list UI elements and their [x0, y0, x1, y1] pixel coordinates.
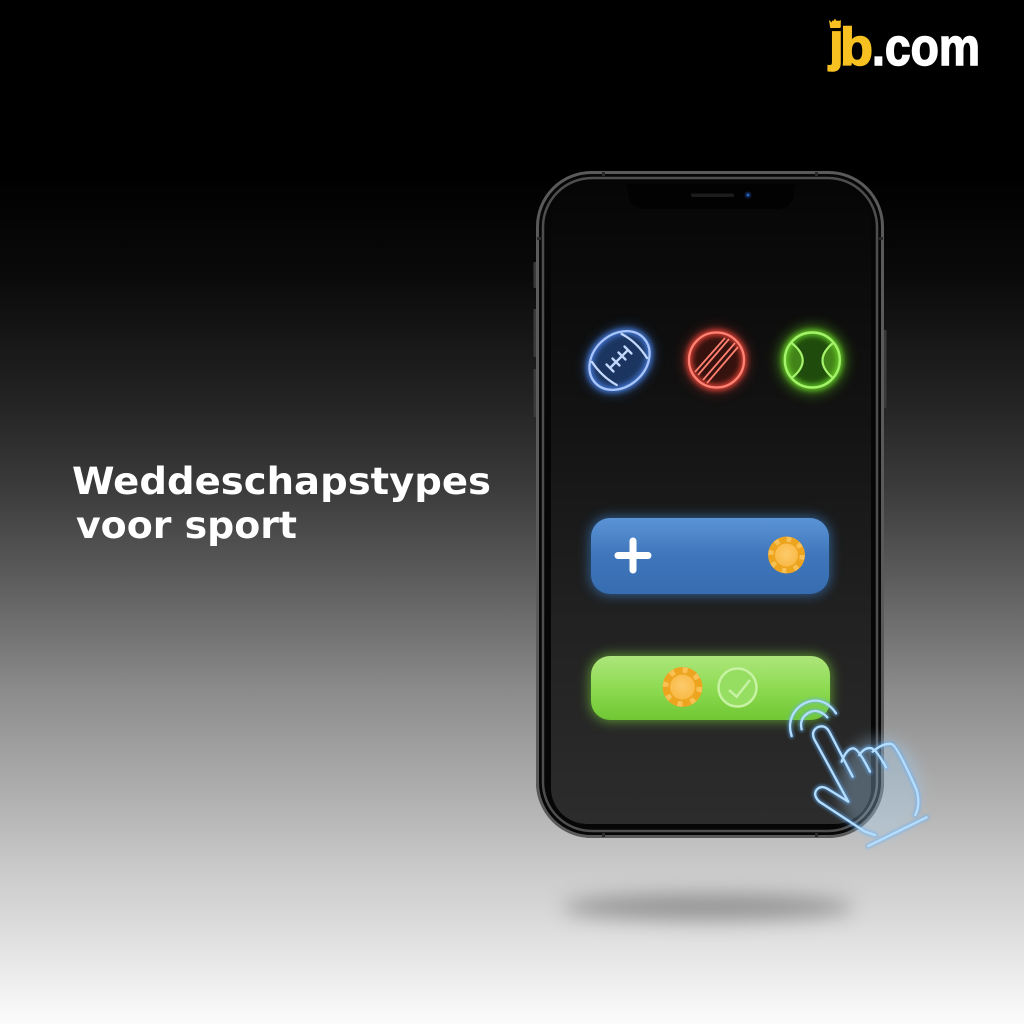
button: blue add stake — [590, 517, 830, 595]
phone screen — [551, 186, 871, 824]
camera — [744, 192, 752, 198]
button: green confirm bet — [590, 655, 831, 721]
phone body — [536, 171, 884, 838]
phone — [534, 171, 886, 838]
icon: check mark — [718, 668, 756, 706]
icon: plus — [618, 541, 648, 570]
side buttons — [534, 262, 886, 417]
phone shadow — [562, 894, 854, 920]
logo: jb.com — [828, 13, 980, 77]
title — [72, 460, 491, 547]
icon: chip — [768, 536, 805, 574]
title: voor sport — [76, 504, 297, 547]
icon: american football — [572, 313, 667, 408]
notch — [625, 184, 797, 209]
icon: cricket ball — [684, 327, 750, 393]
icon: tapping hand — [790, 701, 927, 846]
antenna cuts — [537, 172, 883, 837]
logo wordmark: b — [840, 18, 873, 77]
logo wordmark: .com — [872, 18, 980, 77]
logo wordmark — [828, 13, 980, 77]
icon: logo crown — [829, 18, 841, 28]
title: Weddeschapstypes — [72, 460, 491, 503]
icon: tennis ball — [777, 325, 847, 395]
logo wordmark: j — [828, 13, 844, 72]
speaker — [691, 194, 734, 197]
icon: chip — [662, 667, 702, 707]
